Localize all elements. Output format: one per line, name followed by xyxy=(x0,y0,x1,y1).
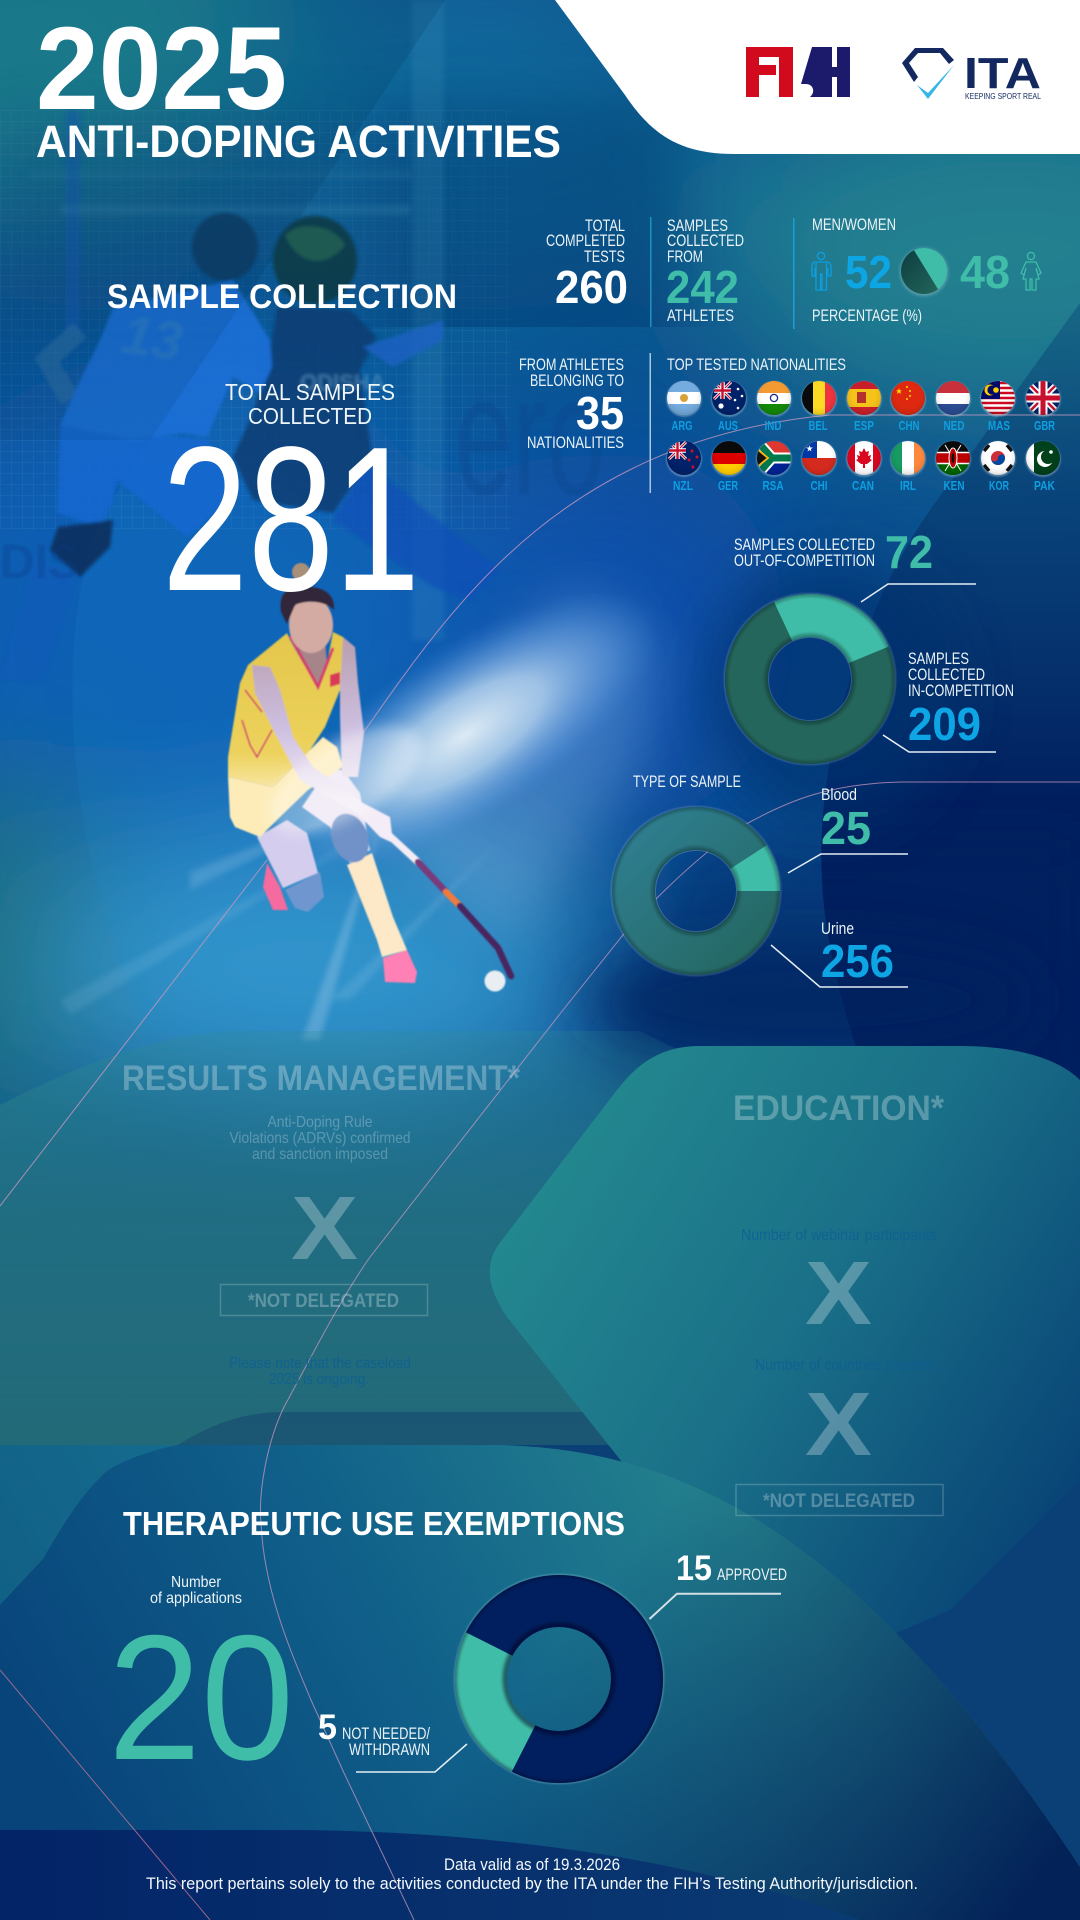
flag: China: CHN xyxy=(898,418,920,433)
flag: India xyxy=(756,381,792,433)
metric: countries reached xyxy=(755,1357,936,1475)
flag patch xyxy=(330,672,340,687)
text: number of applications xyxy=(150,1574,242,1607)
value: 20: 20 xyxy=(108,1598,294,1797)
flag: South Africa xyxy=(756,441,792,493)
stat: men women: PERCENTAGE (%) xyxy=(812,306,922,325)
callout: not needed xyxy=(318,1708,467,1772)
background photo: goal and players: ero xyxy=(455,341,605,531)
title: ANTI-DOPING ACTIVITIES xyxy=(36,116,561,167)
stat: men women xyxy=(812,215,1041,325)
background: dark zone top of education panel xyxy=(580,940,1040,1060)
panel: therapeutic use exemptions xyxy=(108,1506,787,1797)
flag: Spain xyxy=(846,381,882,433)
rear arm xyxy=(340,637,364,777)
background: TUE dark strip xyxy=(178,1412,720,1445)
callout: in competition: COLLECTED xyxy=(908,665,985,684)
text: number of applications: of applications xyxy=(150,1590,242,1607)
flag: Kenya: KEN xyxy=(944,478,964,493)
sock xyxy=(347,853,407,957)
flag: Belgium: BEL xyxy=(808,418,828,433)
stat: samples collected from athletes: 242 xyxy=(666,261,739,313)
stat: samples collected from athletes: ATHLETES xyxy=(667,306,734,325)
callout: urine xyxy=(771,919,908,987)
heading: top tested nationalities: TOP TESTED NATIONALITIES xyxy=(667,355,846,374)
flag: Ireland xyxy=(890,441,926,493)
callout: not needed: NOT NEEDED/ xyxy=(342,1724,430,1743)
hair xyxy=(281,587,334,624)
glow over player xyxy=(252,705,438,855)
callout: blood xyxy=(788,785,908,873)
callout: out of competition xyxy=(734,526,976,602)
stick xyxy=(380,827,511,976)
stat: nationalities xyxy=(519,355,624,452)
background: education panel xyxy=(490,1046,1080,1640)
icon: male xyxy=(812,252,831,290)
front arm xyxy=(252,665,393,843)
flag: Netherlands: NED xyxy=(944,418,964,433)
shirt xyxy=(228,632,346,787)
metric: webinar participants xyxy=(741,1227,937,1344)
flag: Australia: AUS xyxy=(718,418,738,433)
flag: Great Britain: GBR xyxy=(1034,418,1055,433)
player 1 brace xyxy=(50,520,113,577)
stat: total completed tests: 260 xyxy=(555,261,628,313)
back knee patch xyxy=(285,872,324,912)
flag: China xyxy=(890,381,926,433)
stat: total completed tests: COMPLETED xyxy=(546,231,625,250)
flag: New Zealand: NZL xyxy=(673,478,693,493)
total samples collected: 281 xyxy=(162,404,420,634)
flag: Argentina: ARG xyxy=(672,418,692,433)
collar xyxy=(290,636,333,687)
chart: gender pie xyxy=(900,248,948,296)
logo: ITA: ITA xyxy=(964,49,1041,98)
back shoe xyxy=(263,863,288,910)
background: bottom base xyxy=(0,1445,1080,1920)
flag: Korea xyxy=(980,441,1016,493)
background: navy behind first donut xyxy=(705,555,955,825)
flag: Netherlands xyxy=(935,381,971,433)
hair bun xyxy=(292,563,310,581)
background: navy wedge right xyxy=(821,303,1080,1110)
callout: out of competition: 72 xyxy=(885,526,933,578)
goalkeeper leg pads xyxy=(333,463,500,600)
box: not delegated xyxy=(736,1484,943,1516)
total samples collected xyxy=(162,379,420,634)
flag: Korea: KOR xyxy=(989,478,1009,493)
background: central light glow xyxy=(60,539,702,1040)
player 1 shirt xyxy=(60,280,272,440)
stat: nationalities: FROM ATHLETES xyxy=(519,355,624,374)
heading: sample collection: SAMPLE COLLECTION xyxy=(107,278,457,316)
flag: Kenya xyxy=(935,441,971,493)
background: results panel xyxy=(0,1031,780,1445)
value: X: X xyxy=(291,1179,358,1279)
divider xyxy=(650,353,651,493)
background photo: goal and players: DIS xyxy=(0,536,80,589)
flag: Argentina xyxy=(666,381,702,433)
callout: not needed: WITHDRAWN xyxy=(349,1740,430,1759)
metric: webinar participants: Number of webinar participants xyxy=(741,1227,937,1244)
skirt xyxy=(228,737,343,837)
stat: samples collected from athletes: FROM xyxy=(667,247,703,266)
callout: blood: 25 xyxy=(821,802,871,854)
metric: countries reached: Number of countries reached xyxy=(755,1357,936,1374)
total samples collected: COLLECTED xyxy=(248,403,372,429)
metric: countries reached: X xyxy=(805,1375,872,1475)
box: not delegated xyxy=(220,1284,428,1316)
illustration: hockey player xyxy=(228,563,511,992)
text: ADRVs xyxy=(230,1114,410,1163)
flags grid xyxy=(666,381,1061,493)
text: ADRVs: and sanction imposed xyxy=(252,1146,388,1163)
title xyxy=(36,3,561,167)
divider xyxy=(650,217,652,327)
flag: Chile: CHI xyxy=(810,478,828,493)
goalkeeper body xyxy=(233,307,377,513)
callout: in competition: SAMPLES xyxy=(908,649,969,668)
panel: education xyxy=(733,1089,944,1516)
box: not delegated: *NOT DELEGATED xyxy=(763,1490,915,1512)
neck xyxy=(297,640,327,687)
heading: TUE: THERAPEUTIC USE EXEMPTIONS xyxy=(123,1506,625,1543)
flag: Pakistan xyxy=(1025,441,1061,493)
text: ADRVs: Violations (ADRVs) confirmed xyxy=(230,1130,410,1147)
heading: education: EDUCATION* xyxy=(733,1089,944,1128)
background: TUE lighter corner xyxy=(0,1445,178,1605)
callout: urine: Urine xyxy=(821,919,854,938)
flag: Ireland: IRL xyxy=(900,478,916,493)
player 1 shorts xyxy=(57,425,240,537)
player 1 arm xyxy=(47,330,80,400)
callout: approved: APPROVED xyxy=(717,1565,787,1584)
callout: urine: 256 xyxy=(821,935,894,987)
background photo: goal and players: ODISHA xyxy=(300,370,386,395)
background: TUE lower-right shade xyxy=(0,1445,1080,1920)
thin pink line B xyxy=(260,782,1080,1920)
callout: out of competition: OUT-OF-COMPETITION xyxy=(734,551,875,570)
chart: TUE donut xyxy=(454,1574,664,1784)
heading: results management: RESULTS MANAGEMENT* xyxy=(122,1059,520,1098)
flag: Australia xyxy=(711,381,747,433)
thin pink line A xyxy=(0,415,1080,1206)
divider xyxy=(793,218,794,329)
stat: men women: MEN/WOMEN xyxy=(812,215,896,234)
flag: Pakistan: PAK xyxy=(1034,478,1055,493)
background: TUE band xyxy=(0,1445,1080,1920)
flag: Belgium xyxy=(801,381,837,433)
flag: Chile xyxy=(801,441,837,493)
stat: nationalities: NATIONALITIES xyxy=(527,433,624,452)
stat: nationalities: 35 xyxy=(576,387,624,439)
head xyxy=(289,597,333,653)
goalkeeper glove xyxy=(363,320,443,367)
flag: Malaysia: MAS xyxy=(988,418,1010,433)
icon: female xyxy=(1021,252,1041,290)
note: caseload: 2025 is ongoing. xyxy=(269,1371,369,1388)
heading: type of sample: TYPE OF SAMPLE xyxy=(633,772,741,791)
flag: New Zealand xyxy=(666,441,702,493)
stat: samples collected from athletes xyxy=(666,216,744,325)
back leg xyxy=(257,820,318,888)
front shoe xyxy=(383,950,417,983)
flag: Germany: GER xyxy=(718,478,738,493)
panel: results management xyxy=(122,1059,520,1388)
player 1 lower leg xyxy=(0,557,77,680)
stat: men women: 52 xyxy=(845,246,892,298)
chart: in vs out of competition donut xyxy=(724,594,896,764)
background: navy lower right xyxy=(600,840,1080,1110)
stat: total completed tests: TESTS xyxy=(584,247,625,266)
player 1 head xyxy=(192,213,258,281)
stat: samples collected from athletes: SAMPLES xyxy=(667,216,728,235)
flag: Canada: CAN xyxy=(852,478,874,493)
thin pink line C xyxy=(0,1670,210,1920)
flag: India: IND xyxy=(764,418,782,433)
stat: total completed tests: TOTAL xyxy=(585,216,625,235)
background photo: goal and players xyxy=(0,0,680,680)
background: footer band xyxy=(0,1830,860,1920)
callout: approved: 15 xyxy=(676,1549,712,1588)
callout: not needed: 5 xyxy=(318,1708,337,1747)
chart: blood vs urine donut xyxy=(612,806,780,976)
front thigh xyxy=(302,770,370,863)
flag: Germany xyxy=(711,441,747,493)
background: diagonal top sector xyxy=(0,0,445,440)
text: ADRVs: Anti-Doping Rule xyxy=(268,1114,373,1131)
box: not delegated: *NOT DELEGATED xyxy=(248,1290,399,1312)
note: caseload: Please note that the caseload xyxy=(229,1355,411,1372)
stat: nationalities: BELONGING TO xyxy=(530,371,624,390)
white corner panel xyxy=(555,0,1080,154)
total samples collected: TOTAL SAMPLES xyxy=(225,379,395,405)
background: large arc overlay xyxy=(72,0,660,1035)
logo: ITA: KEEPING SPORT REAL xyxy=(965,92,1041,101)
flag: Malaysia xyxy=(980,381,1016,433)
title: 2025 xyxy=(36,3,287,135)
text: number of applications: Number xyxy=(171,1574,222,1591)
goalkeeper helmet xyxy=(273,216,357,304)
note: caseload xyxy=(229,1355,411,1388)
background photo: goal and players: 13 xyxy=(118,304,186,372)
stat: samples collected from athletes: COLLECTED xyxy=(667,231,744,250)
flag: South Africa: RSA xyxy=(762,478,784,493)
callout: approved xyxy=(650,1549,787,1619)
stat: total completed tests xyxy=(546,216,628,313)
callout: out of competition: SAMPLES COLLECTED xyxy=(734,535,875,554)
flag: Canada xyxy=(846,441,882,493)
stat: men women: 48 xyxy=(960,246,1010,298)
logo: FIH xyxy=(746,47,850,97)
metric: webinar participants: X xyxy=(805,1244,872,1344)
footer text xyxy=(146,1855,918,1893)
callout: in competition xyxy=(883,649,1014,752)
footer text: This report pertains solely to the activities conducted by the ITA under the FIH’s Testing Authority/jurisdiction. xyxy=(146,1874,918,1893)
callout: blood: Blood xyxy=(821,785,857,804)
logo: ITA xyxy=(902,48,1041,101)
front knee patch xyxy=(325,808,375,868)
callout: in competition: IN-COMPETITION xyxy=(908,681,1014,700)
footer text: Data valid as of 19.3.2026 xyxy=(444,1855,620,1874)
callout: in competition: 209 xyxy=(908,698,981,750)
ball xyxy=(484,970,506,992)
flag: Great Britain xyxy=(1025,381,1061,433)
flag: Spain: ESP xyxy=(854,418,874,433)
shirt pattern xyxy=(242,690,272,757)
